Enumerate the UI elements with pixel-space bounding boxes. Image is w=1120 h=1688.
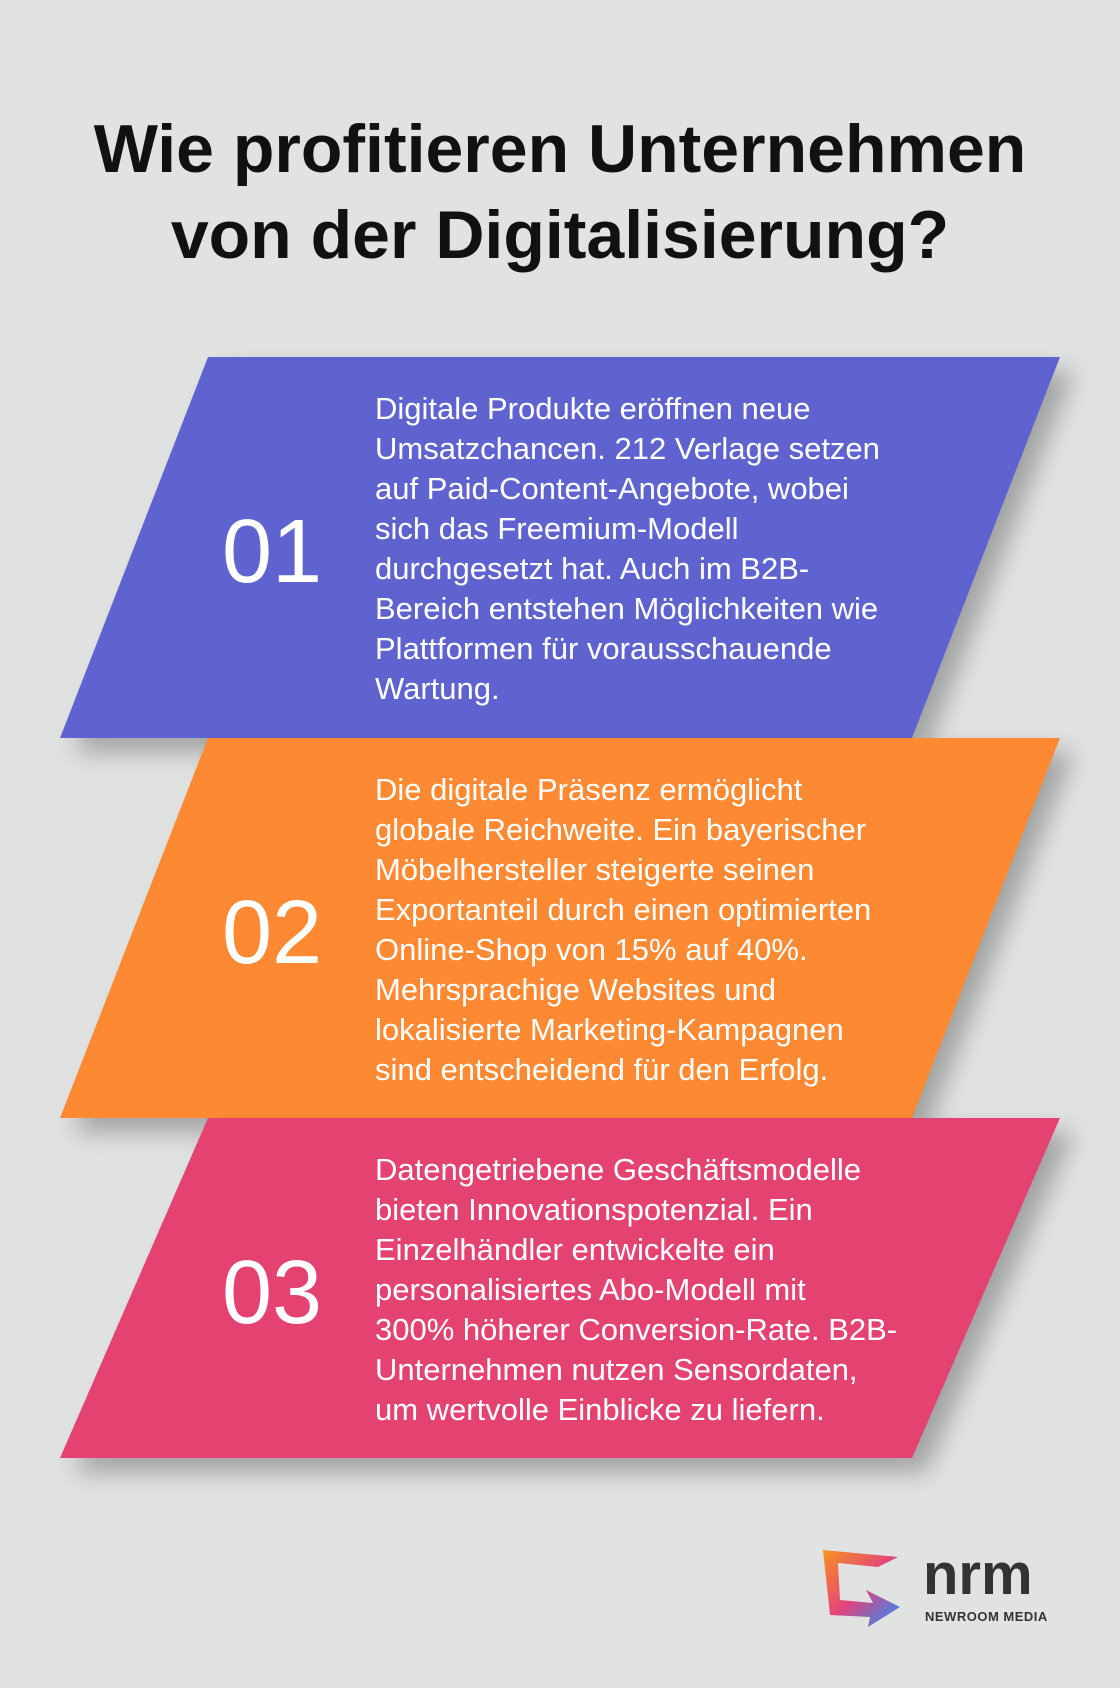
panel: 03 [60, 1118, 1080, 1485]
title [94, 111, 1026, 273]
text block 02: globale Reichweite. Ein bayerischer [375, 812, 866, 847]
text block 01: Wartung. [375, 671, 500, 706]
text block 03: um wertvolle Einblicke zu liefern. [375, 1392, 825, 1427]
text block 02: Die digitale Präsenz ermöglicht [375, 772, 802, 807]
logo text: nrm [923, 1542, 1033, 1607]
text block 01: auf Paid-Content-Angebote, wobei [375, 471, 849, 506]
text block 03: 300% höherer Conversion-Rate. B2B- [375, 1312, 897, 1347]
text block 01: Plattformen für vorausschauende [375, 631, 832, 666]
logo: NEWROOM MEDIA [925, 1609, 1048, 1624]
text block 01: durchgesetzt hat. Auch im B2B- [375, 551, 809, 586]
text block 01: Umsatzchancen. 212 Verlage setzen [375, 431, 880, 466]
text block 02: Exportanteil durch einen optimierten [375, 892, 871, 927]
logo [823, 1542, 1048, 1627]
number 03: 03 [222, 1243, 322, 1343]
text block 01: sich das Freemium-Modell [375, 511, 738, 546]
panel: 01 [60, 357, 1080, 765]
text block 02: Online-Shop von 15% auf 40%. [375, 932, 808, 967]
text block 03: bieten Innovationspotenzial. Ein [375, 1192, 813, 1227]
panel: 02 [60, 738, 1080, 1145]
text block 02: lokalisierte Marketing-Kampagnen [375, 1012, 844, 1047]
text block 02: Mehrsprachige Websites und [375, 972, 776, 1007]
text block 02 [375, 772, 871, 1087]
title: Wie profitieren Unternehmen [94, 111, 1026, 187]
text block 02: sind entscheidend für den Erfolg. [375, 1052, 828, 1087]
text block 03: Unternehmen nutzen Sensordaten, [375, 1352, 858, 1387]
icon: logo mark [823, 1550, 900, 1627]
text block 03: Datengetriebene Geschäftsmodelle [375, 1152, 861, 1187]
text block 03: personalisiertes Abo-Modell mit [375, 1272, 806, 1307]
text block 01 [375, 391, 880, 706]
text block 03: Einzelhändler entwickelte ein [375, 1232, 775, 1267]
title: von der Digitalisierung? [171, 197, 949, 273]
text block 03 [375, 1152, 897, 1427]
number 02: 02 [222, 883, 322, 983]
text block 02: Möbelhersteller steigerte seinen [375, 852, 814, 887]
number 01: 01 [222, 502, 322, 602]
text block 01: Digitale Produkte eröffnen neue [375, 391, 810, 426]
text block 01: Bereich entstehen Möglichkeiten wie [375, 591, 878, 626]
